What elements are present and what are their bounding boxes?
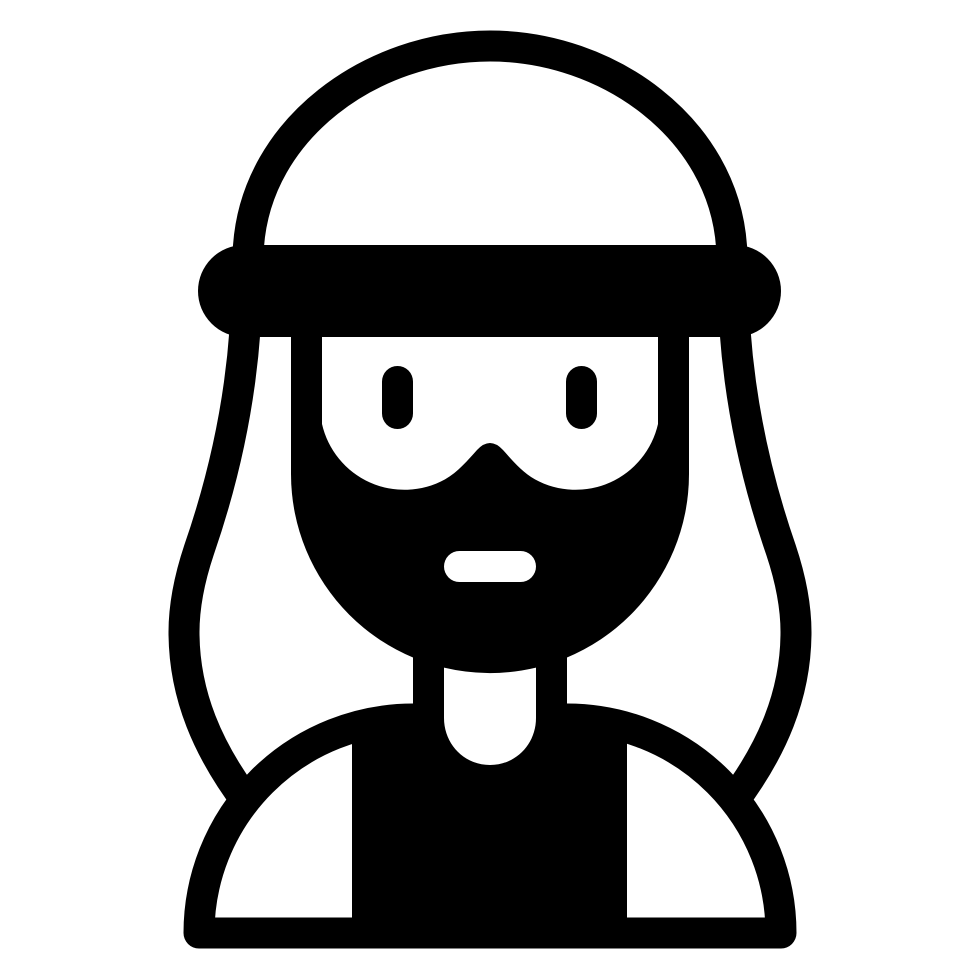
mouth	[444, 551, 536, 582]
right eye	[566, 366, 597, 429]
scarf right drape	[732, 330, 796, 803]
torso and shoulders	[199, 719, 781, 933]
scarf left drape	[184, 330, 248, 803]
headband	[198, 245, 781, 337]
left eye	[382, 366, 413, 429]
neck	[413, 640, 567, 730]
face skin area	[322, 337, 658, 490]
garment centre panel	[352, 710, 627, 930]
headscarf dome	[247, 46, 733, 262]
neck opening	[444, 668, 536, 765]
face and beard	[291, 330, 689, 673]
